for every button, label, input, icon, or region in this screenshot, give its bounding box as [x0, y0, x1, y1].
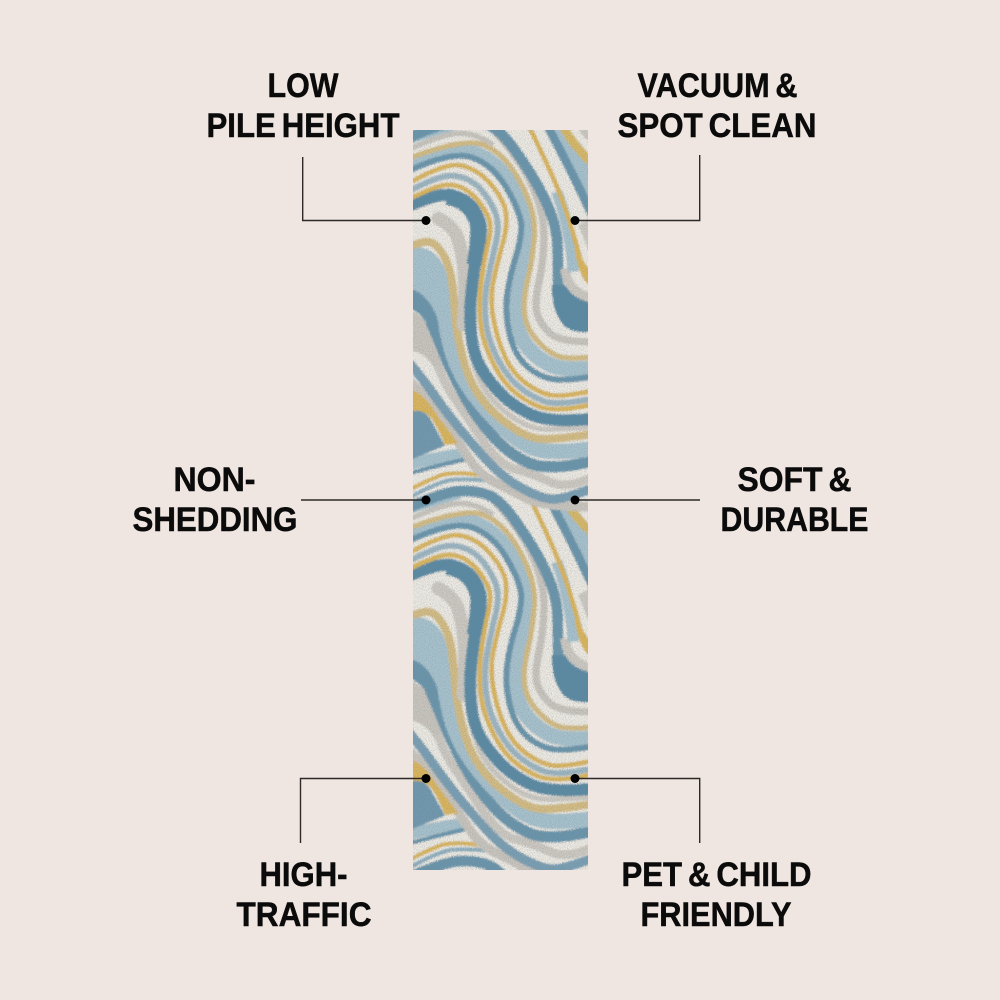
callout: high-traffic	[236, 774, 430, 934]
callout: vacuum and spot clean	[570, 67, 816, 225]
callout: low pile height: LOW	[268, 67, 339, 105]
callout: high-traffic: TRAFFIC	[236, 896, 372, 934]
rug runner with wavy pattern	[413, 130, 588, 870]
callout: low pile height	[206, 67, 430, 225]
callout: pet and child friendly: PET & CHILD	[622, 856, 812, 894]
callout: soft and durable: SOFT &	[738, 461, 852, 499]
callout: non-shedding: SHEDDING	[132, 501, 298, 539]
callout: pet and child friendly: FRIENDLY	[640, 896, 792, 934]
callout: vacuum and spot clean: VACUUM &	[638, 67, 798, 105]
callout: pet and child friendly	[570, 774, 812, 934]
callout: vacuum and spot clean: SPOT CLEAN	[618, 107, 816, 145]
callout: low pile height: PILE HEIGHT	[206, 107, 400, 145]
callout: non-shedding	[132, 461, 430, 539]
callout: high-traffic: HIGH-	[260, 856, 348, 894]
callout: soft and durable: DURABLE	[720, 501, 868, 539]
callout: non-shedding: NON-	[174, 461, 256, 499]
callout: soft and durable	[570, 461, 868, 539]
